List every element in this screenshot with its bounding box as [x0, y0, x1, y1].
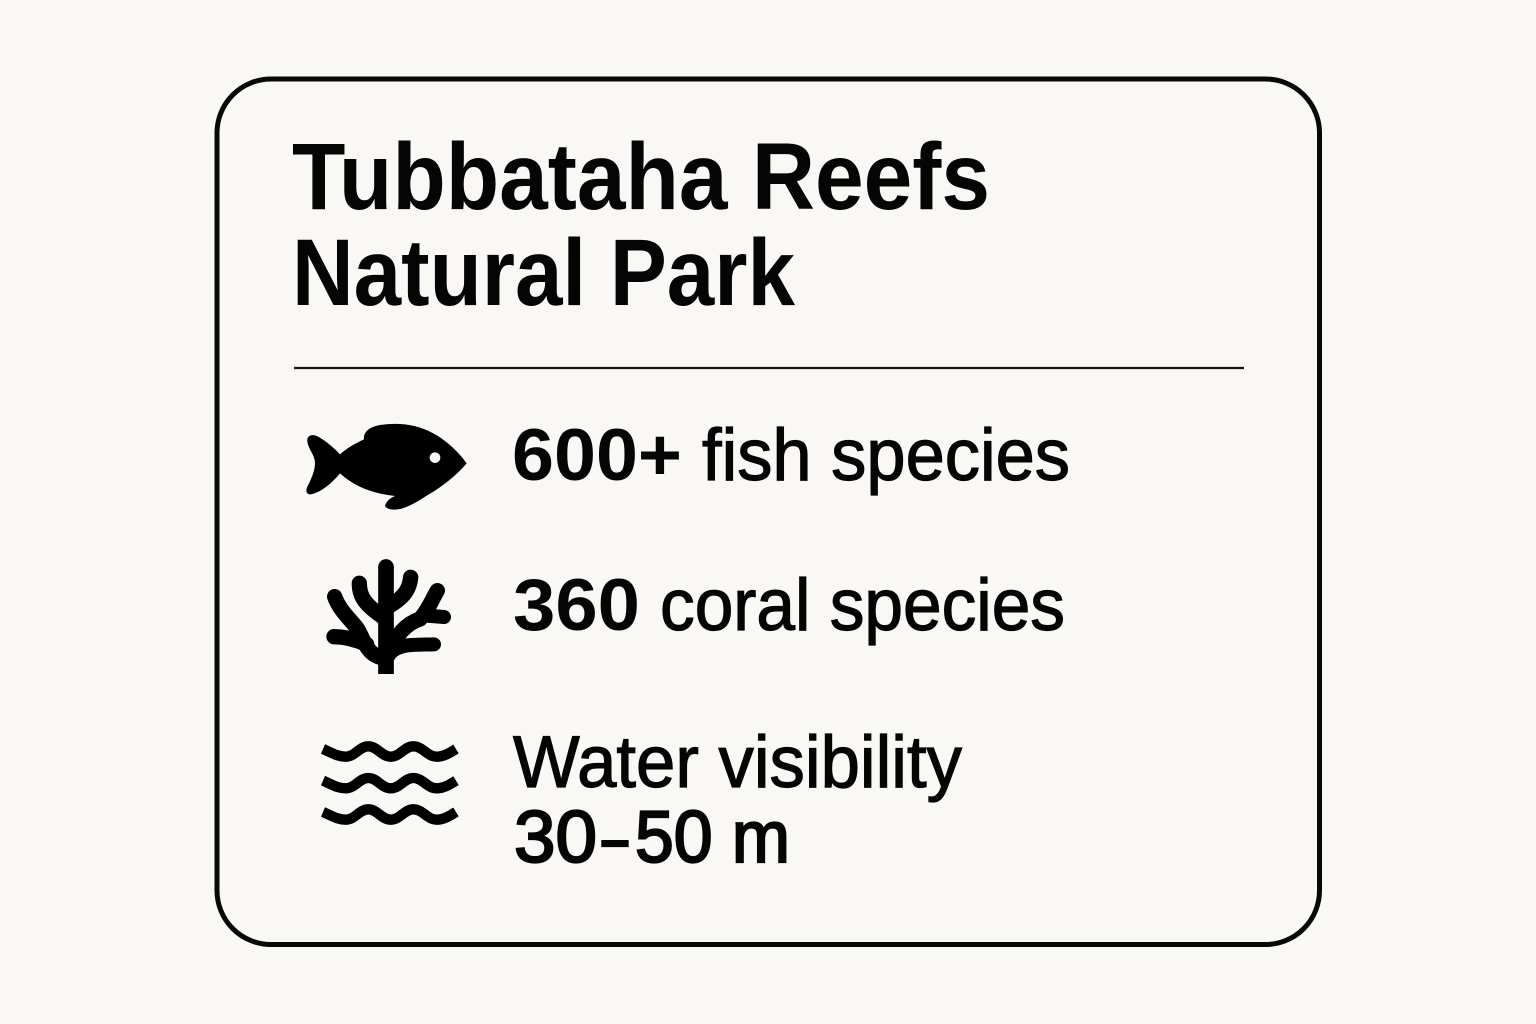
title: Tubbataha Reefs [292, 124, 990, 230]
title [292, 124, 990, 326]
text: fish species [512, 415, 1070, 496]
title: Natural Park [292, 220, 795, 326]
icon: water waves [323, 746, 456, 820]
text: coral species: 360 [513, 565, 640, 646]
icon: fish [306, 424, 467, 510]
icon: coral [334, 559, 444, 674]
text: water visibility: Water visibility [513, 722, 962, 803]
text: water visibility: 30 [514, 797, 597, 878]
text: fish species: fish species [702, 415, 1070, 496]
panel: park facts card [217, 79, 1320, 944]
text: fish species: 600+ [512, 415, 682, 496]
text: coral species: coral species [660, 565, 1065, 646]
text: water visibility: – [602, 797, 628, 878]
text: water visibility: 50 m [635, 797, 790, 878]
text: water visibility [513, 722, 962, 878]
